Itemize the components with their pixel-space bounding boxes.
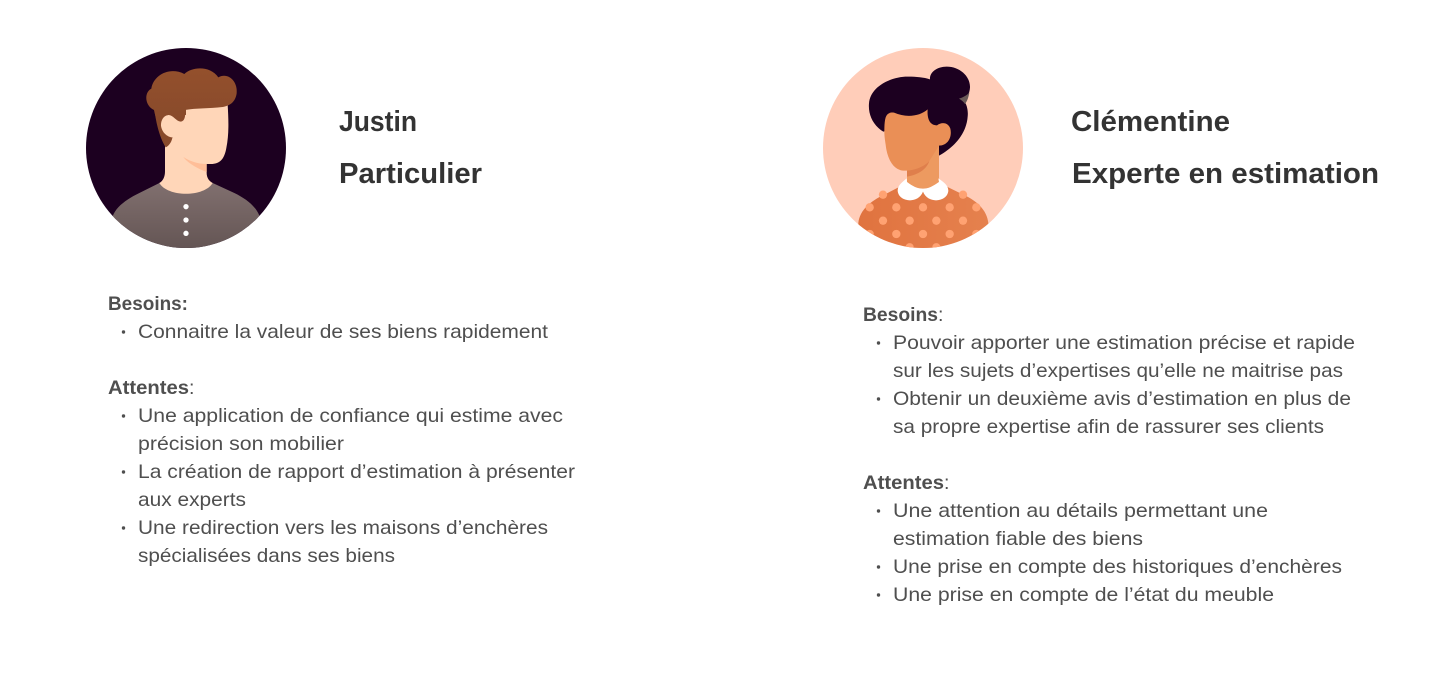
text block: Clémentine needs: sa propre expertise afin de rassurer ses clients [893, 416, 1324, 438]
text block: Clémentine needs: Besoins [863, 304, 938, 326]
role: Experte en estimation: Experte en estimation [1072, 158, 1379, 190]
shirt [113, 182, 260, 251]
name: Justin: Justin [339, 106, 417, 138]
text block: Clémentine needs: sur les sujets d’expertises qu’elle ne maitrise pas [893, 360, 1343, 382]
text block: Justin expectations: Une application de confiance qui estime avec [138, 405, 563, 427]
dress dots [865, 190, 980, 251]
neck and face [159, 105, 228, 194]
text block: Justin expectations: La création de rapport d’estimation à présenter [138, 461, 576, 483]
text block: Clémentine expectations: estimation fiable des biens [893, 528, 1143, 550]
text block: Justin expectations: aux experts [138, 489, 246, 511]
ear [161, 115, 186, 138]
bun shadow [959, 92, 969, 104]
text block: Clémentine needs: : [938, 304, 943, 326]
text block: Justin needs: Connaitre la valeur de ses biens rapidement [138, 321, 549, 343]
text block: Justin expectations [108, 377, 576, 567]
neck shadow [907, 161, 929, 177]
text block: Justin needs: Besoins: [108, 293, 188, 315]
text block: Clémentine expectations: : [944, 472, 949, 494]
text block: Justin needs [108, 293, 549, 343]
avatar: Clémentine [823, 48, 1023, 251]
name: Clémentine: Clémentine [1071, 106, 1230, 138]
text block: Clémentine needs [863, 304, 1355, 438]
collar [898, 178, 948, 200]
avatar: Justin [86, 48, 286, 251]
persona: Justin [86, 48, 576, 567]
hair [869, 67, 970, 156]
text block: Justin expectations: spécialisées dans ses biens [138, 545, 395, 567]
text block: Justin expectations: précision son mobilier [138, 433, 345, 455]
neck shadow [183, 157, 207, 172]
face [884, 109, 951, 171]
text block: Justin expectations: : [189, 377, 194, 399]
persona: Clémentine [823, 48, 1379, 606]
neck [907, 141, 939, 189]
text block: Clémentine expectations [863, 472, 1342, 606]
text block: Clémentine expectations: Une prise en compte des historiques d’enchères [893, 556, 1342, 578]
text block: Clémentine expectations: Une attention au détails permettant une [893, 500, 1268, 522]
sideburn [154, 106, 186, 147]
buttons [183, 204, 189, 236]
text block: Clémentine expectations: Attentes [863, 472, 944, 494]
text block: Justin expectations: Attentes [108, 377, 189, 399]
hair [146, 68, 237, 123]
text block: Justin expectations: Une redirection vers les maisons d’enchères [138, 517, 548, 539]
text block: Clémentine expectations: Une prise en compte de l’état du meuble [893, 584, 1274, 606]
text block: Clémentine needs: Pouvoir apporter une estimation précise et rapide [893, 332, 1355, 354]
text block: Clémentine needs: Obtenir un deuxième avis d’estimation en plus de [893, 388, 1351, 410]
dress [858, 186, 988, 251]
role: Particulier: Particulier [339, 158, 482, 190]
